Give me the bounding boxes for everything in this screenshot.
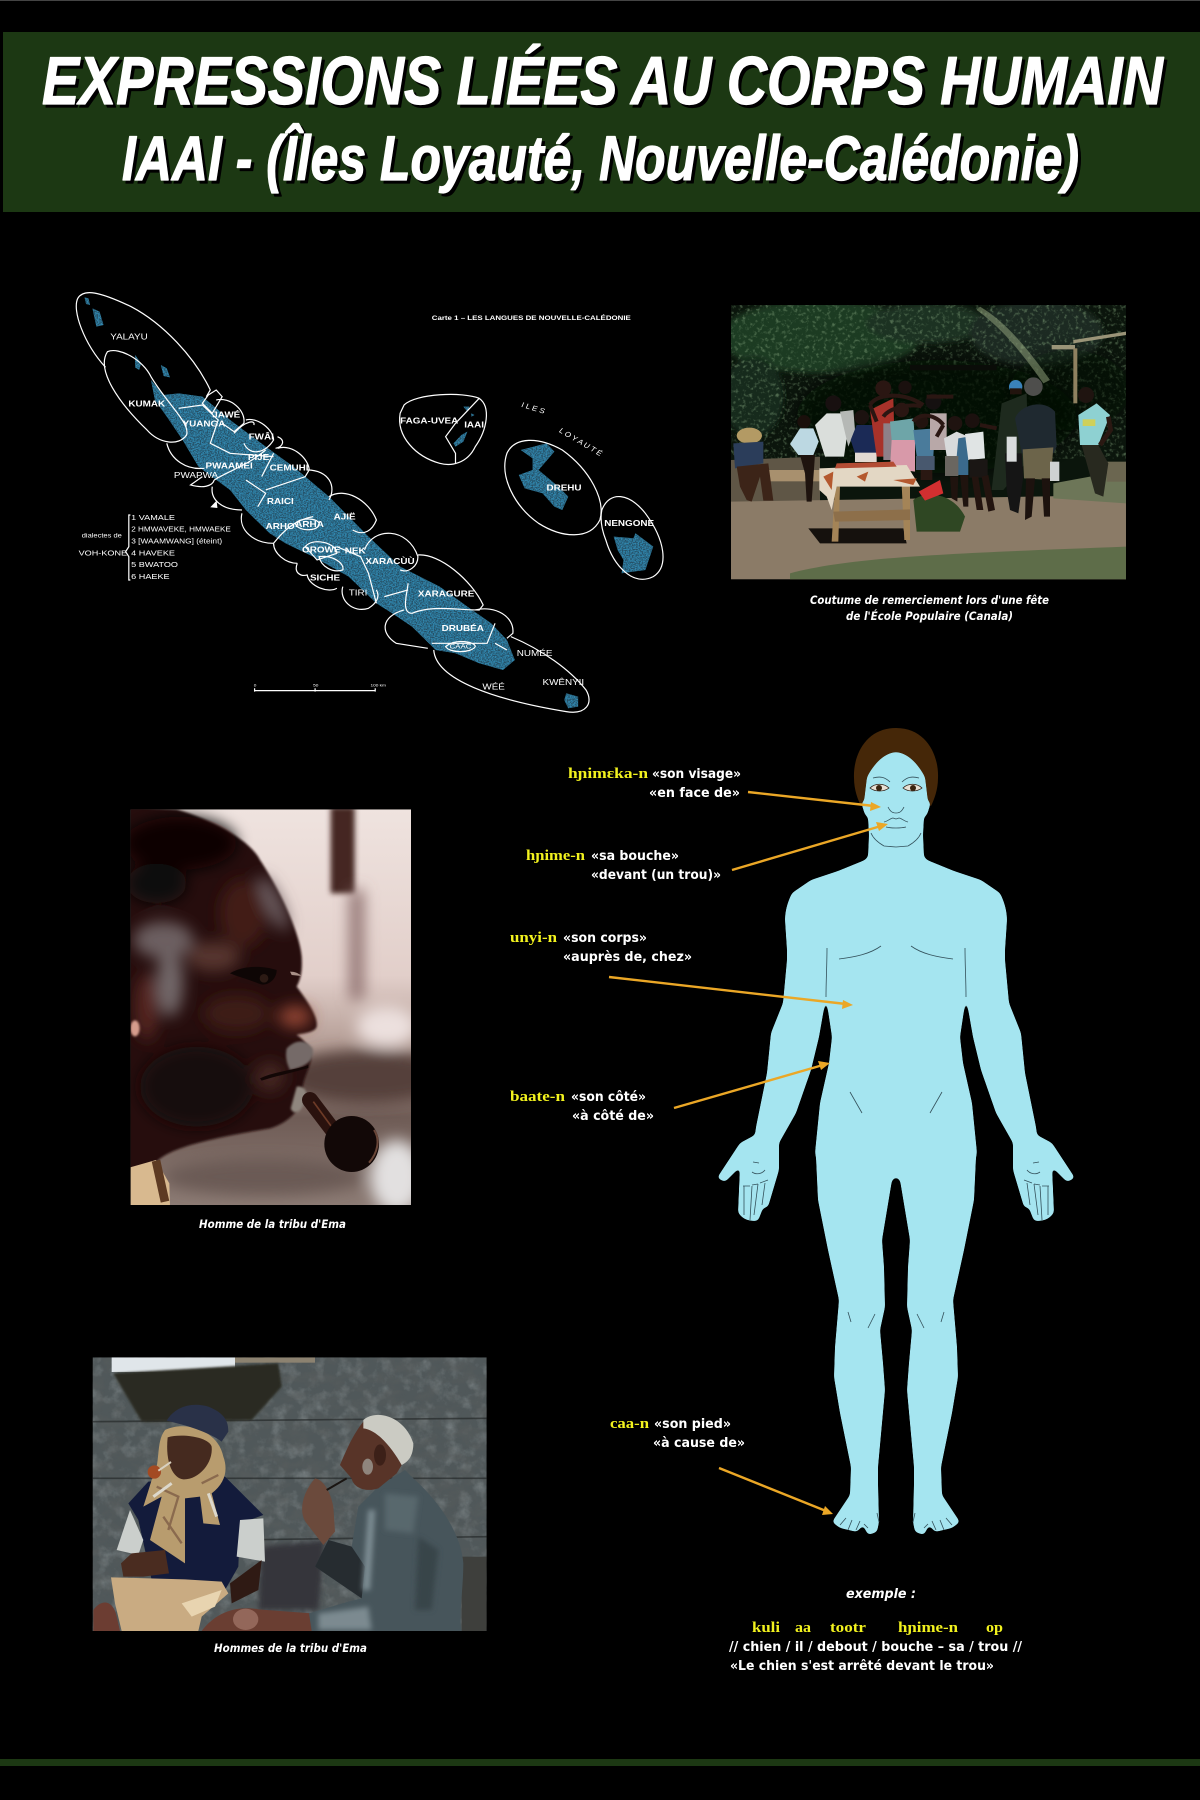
map labels: CAAC — [450, 642, 471, 650]
map labels: I L E S — [520, 401, 546, 415]
man with white hair — [202, 1415, 463, 1631]
map labels: KUMAK — [128, 399, 166, 408]
title banner — [3, 32, 1200, 212]
map labels: 5 BWATOO — [131, 560, 178, 569]
example sentence: // chien / il / debout / bouche – sa / trou // — [729, 1639, 1022, 1655]
map labels: XARAGURE — [418, 589, 474, 598]
map labels: dialectes de — [82, 533, 122, 539]
pipe — [310, 1100, 379, 1172]
islands — [85, 297, 653, 708]
example sentence: exemple : — [846, 1586, 916, 1602]
map labels: 4 HAVEKE — [131, 548, 175, 557]
photo: two men smoking in front of a wall — [93, 1357, 487, 1631]
adults — [992, 377, 1111, 520]
map labels: YALAYU — [110, 332, 148, 341]
map labels: OROWE — [302, 545, 340, 554]
photo: man smoking a pipe — [130, 809, 411, 1205]
map labels: 100 km — [370, 683, 386, 688]
example sentence: «Le chien s'est arrêté devant le trou» — [730, 1658, 994, 1674]
map labels: TIRI — [349, 588, 367, 597]
map labels: XARACÙÙ — [365, 556, 415, 566]
label: foot: «son pied» — [654, 1416, 731, 1432]
label: body: «son corps» — [563, 930, 647, 946]
arrow: side — [674, 1061, 830, 1108]
map labels: ARHA — [295, 520, 324, 529]
photo caption: ceremony: de l'École Populaire (Canala) — [846, 608, 1013, 623]
label: mouth: «devant (un trou)» — [591, 867, 721, 883]
map labels: ARHO — [266, 522, 295, 531]
label: face — [568, 766, 741, 801]
label: face: «son visage» — [652, 766, 741, 782]
map labels: 1 VAMALE — [131, 513, 175, 522]
map labels: PIJE — [248, 453, 269, 462]
label: face: «en face de» — [649, 785, 740, 801]
label: side: «son côté» — [571, 1089, 646, 1105]
map labels: FWÂI — [249, 431, 274, 441]
arrow: face — [748, 792, 881, 811]
label: body — [510, 930, 692, 965]
map labels: WÉÉ — [482, 682, 505, 691]
map labels: L O Y A U T É — [557, 426, 604, 458]
label: body: unyi-n — [510, 930, 557, 946]
map labels: 0 — [254, 683, 257, 688]
map labels: AJIË — [334, 512, 356, 521]
map labels: DREHU — [546, 483, 582, 492]
arrow: body — [609, 977, 853, 1009]
human body figure — [717, 728, 1075, 1535]
head — [123, 807, 317, 1173]
map labels: YUANGA — [183, 419, 226, 428]
map labels: FAGA-UVEA — [400, 416, 459, 425]
map labels: 50 — [313, 683, 319, 688]
map labels: 6 HAEKE — [131, 572, 170, 581]
burlap bag — [111, 1577, 228, 1631]
label: body: «auprès de, chez» — [563, 949, 692, 965]
map labels: NENGONE — [604, 519, 654, 528]
example sentence: tootr — [830, 1620, 867, 1636]
map labels: PWAAMEI — [206, 461, 253, 470]
example sentence: aa — [795, 1620, 812, 1636]
map labels: RAICI — [267, 497, 294, 506]
map labels: Carte 1 – LES LANGUES DE NOUVELLE-CALÉDONIE — [432, 314, 631, 322]
label: foot: «à cause de» — [653, 1435, 745, 1451]
label: face: hɲimɛka-n — [568, 766, 648, 782]
map labels: DRUBÉA — [442, 624, 484, 633]
label: side — [510, 1089, 654, 1124]
collar — [130, 1160, 170, 1205]
map labels: PWAPWA — [174, 471, 219, 480]
map labels — [79, 314, 654, 691]
seated man — [733, 428, 773, 502]
table with cloth and offerings — [819, 462, 965, 542]
label: mouth — [526, 848, 721, 883]
man with cap and scarf — [117, 1405, 265, 1603]
label: mouth: hɲime-n — [526, 848, 585, 864]
label: side: «à côté de» — [572, 1108, 654, 1124]
photo caption: two men: Hommes de la tribu d'Ema — [214, 1641, 367, 1655]
map labels: NEK — [345, 546, 366, 555]
label: side: baate-n — [510, 1089, 565, 1105]
label: mouth: «sa bouche» — [591, 848, 679, 864]
map labels: VOH-KONE — [79, 548, 128, 557]
language region outlines — [76, 293, 663, 712]
example sentence — [729, 1586, 1022, 1674]
photo: thanksgiving ceremony at the school festival — [720, 300, 1130, 579]
example sentence: hɲime-n — [898, 1620, 958, 1636]
map labels: NUMÉE — [517, 649, 552, 658]
map labels: JAWÉ — [212, 410, 240, 419]
arrow: foot — [719, 1468, 833, 1515]
photo caption: ceremony: Coutume de remerciement lors d'une fête — [810, 593, 1049, 607]
photo caption: man: Homme de la tribu d'Ema — [199, 1217, 346, 1231]
map labels: 3 [WAAMWANG] (éteint) — [131, 536, 222, 545]
label: foot — [610, 1416, 745, 1451]
map labels: IAAI — [464, 420, 484, 429]
map labels: CEMUHI — [270, 463, 309, 472]
arrow: mouth — [732, 822, 888, 870]
example sentence: op — [986, 1620, 1003, 1636]
map labels: KWÊNYII — [543, 678, 584, 687]
map labels: SICHE — [310, 573, 340, 582]
photo caption: ceremony — [810, 593, 1049, 623]
map of the languages of New Caledonia — [76, 293, 663, 712]
label: foot: caa-n — [610, 1416, 649, 1432]
map labels: 2 HMWAVEKE, HMWAEKE — [131, 524, 231, 533]
example sentence: kuli — [752, 1620, 780, 1636]
children — [790, 380, 997, 512]
